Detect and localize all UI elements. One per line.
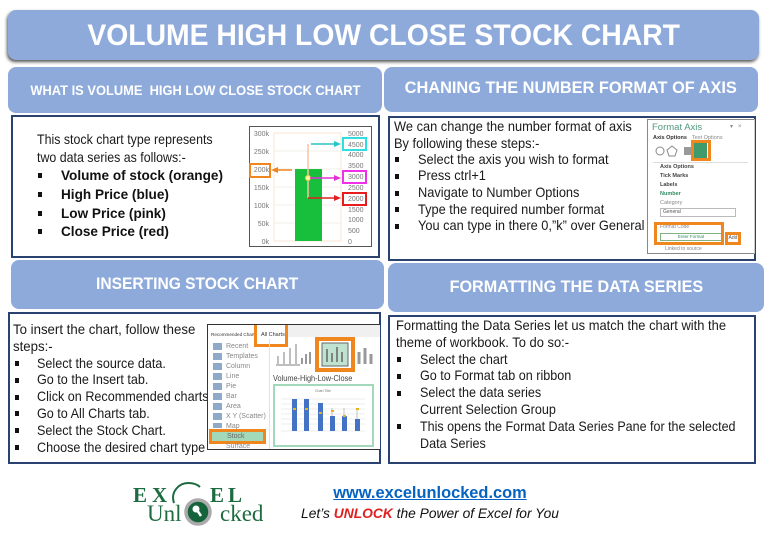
steps list: Type the required number format	[418, 200, 604, 216]
pane icons	[656, 146, 691, 156]
steps list: Data Series	[420, 434, 486, 450]
chart: volume high low close example	[249, 126, 372, 247]
heading: what is volume high low close	[8, 67, 382, 113]
screenshot: format axis pane: Axis Options	[660, 164, 694, 170]
screenshot: format axis pane: Category	[660, 200, 682, 206]
logo: excel unlocked: E	[210, 483, 224, 507]
panel: inserting stock chart	[8, 312, 381, 464]
heading: formatting the data series	[388, 263, 764, 312]
steps list: Choose the desired chart type	[37, 438, 205, 454]
chart: volume high low close example: 2000	[348, 196, 364, 203]
heading: changing number format	[384, 67, 758, 112]
intro text	[37, 130, 213, 164]
callout boxes	[343, 138, 366, 150]
intro text: This stock chart type represents	[37, 130, 213, 146]
heading: inserting stock chart: INSERTING STOCK CHART	[96, 275, 299, 293]
chart: volume high low close example: 300k	[254, 131, 269, 138]
chart: volume high low close example: 1500	[348, 207, 364, 214]
screenshot: insert chart dialog: Line	[226, 373, 239, 380]
intro text: two data series as follows:-	[37, 148, 186, 164]
screenshot: insert chart dialog: Stock	[227, 433, 245, 440]
screenshot: format axis pane: Format Axis	[652, 122, 702, 133]
panel: what is the chart	[11, 115, 380, 258]
screenshot: insert chart dialog: Volume-High-Low-Close	[273, 374, 352, 383]
logo: excel unlocked: cked	[220, 501, 263, 526]
series list: High Price (blue)	[61, 186, 169, 202]
chart: volume high low close example: 3500	[348, 163, 364, 170]
title banner: VOLUME HIGH LOW CLOSE STOCK CHART	[87, 19, 680, 52]
screenshot: insert chart dialog: Surface	[226, 443, 250, 450]
heading: changing number format: CHANING THE NUMBER FORMAT OF AXIS	[405, 79, 737, 97]
chart: volume high low close example: 0k	[262, 239, 269, 246]
screenshot: format axis pane: Axis Options	[653, 135, 687, 141]
intro text: To insert the chart, follow these	[13, 320, 195, 336]
chart type icons	[213, 343, 222, 428]
arrows	[311, 143, 335, 145]
steps list: Select the source data.	[37, 354, 166, 370]
intro text: theme of workbook. To do so:-	[396, 334, 569, 350]
heading: formatting the data series: FORMATTING THE DATA SERIES	[449, 278, 703, 296]
steps list: Current Selection Group	[420, 401, 556, 417]
chart: volume high low close example: 500	[348, 228, 360, 235]
steps list	[15, 354, 209, 455]
intro text: We can change the number format of axis	[394, 118, 632, 134]
steps list: Select the chart	[420, 350, 508, 366]
logo: excel unlocked: Unl	[147, 501, 182, 526]
steps list	[397, 350, 735, 450]
heading: inserting stock chart	[11, 260, 384, 309]
chart preview: Chart Title	[315, 389, 331, 393]
intro text: steps:-	[13, 338, 53, 354]
steps list: You can type in there 0,”k” over General	[418, 217, 644, 233]
chart preview	[273, 384, 374, 447]
steps list: Go to All Charts tab.	[37, 405, 150, 421]
steps list: Navigate to Number Options	[418, 184, 579, 200]
screenshot: insert chart dialog: All Charts	[261, 332, 285, 338]
screenshot: format axis pane: Tick Marks	[660, 173, 688, 179]
screenshot: format axis pane: ▾ ×	[730, 124, 742, 130]
chart: volume high low close example: 4000	[348, 152, 364, 159]
screenshot: format axis pane: Linked to source	[665, 246, 702, 252]
screenshot: insert chart dialog: Area	[226, 403, 241, 410]
logo: excel unlocked	[133, 482, 264, 526]
screenshot: insert chart dialog: Column	[226, 363, 250, 370]
logo: excel unlocked: X	[152, 483, 167, 507]
heading: what is volume high low close: WHAT IS VOLUME HIGH LOW CLOSE STOCK CHART	[30, 82, 360, 98]
screenshot: insert chart dialog: Bar	[226, 393, 237, 400]
series list: Close Price (red)	[61, 223, 169, 239]
chart: volume high low close example: 250k	[254, 149, 269, 156]
series list: Volume of stock (orange)	[61, 167, 223, 183]
website link: www.excelunlocked.com	[333, 484, 527, 502]
steps list: Go to Format tab on ribbon	[420, 367, 571, 383]
steps list: Select the data series	[420, 384, 541, 400]
logo: excel unlocked: E	[133, 483, 147, 507]
chart: volume high low close example: 5000	[348, 131, 364, 138]
chart: volume high low close example: 3000	[348, 174, 364, 181]
screenshot: format axis pane: Enter Format	[678, 234, 704, 239]
chart: volume high low close example: 200k	[254, 167, 269, 174]
screenshot: insert chart dialog	[207, 324, 380, 450]
steps list: Go to the Insert tab.	[37, 371, 148, 387]
intro text	[394, 118, 632, 151]
intro text: Formatting the Data Series let us match the chart with the	[396, 316, 726, 332]
intro text	[13, 320, 195, 354]
screenshot: format axis pane: Text Options	[692, 135, 723, 141]
screenshot: insert chart dialog: Pie	[226, 383, 236, 390]
screenshot: insert chart dialog: Templates	[226, 353, 258, 360]
chart: volume high low close example: 2500	[348, 185, 364, 192]
title banner	[8, 10, 759, 60]
chart: volume high low close example: 0	[348, 239, 352, 246]
steps list: Press ctrl+1	[418, 167, 486, 183]
intro text: By following these steps:-	[394, 134, 539, 150]
chart: volume high low close example: 50k	[258, 221, 269, 228]
steps list: Click on Recommended charts	[37, 388, 209, 404]
logo: excel unlocked: L	[228, 483, 242, 507]
steps list: Select the Stock Chart.	[37, 422, 166, 438]
panel: formatting data series	[388, 315, 756, 464]
screenshot: format axis pane: Format Code	[660, 224, 689, 230]
steps list: This opens the Format Data Series Pane for the selected	[420, 418, 735, 434]
screenshot: format axis pane	[647, 119, 755, 254]
chart: volume high low close example: 4500	[348, 142, 364, 149]
chart type thumbnails	[276, 337, 372, 372]
screenshot: format axis pane: General	[663, 209, 681, 215]
panel: changing number format	[388, 116, 756, 261]
screenshot: insert chart dialog: Map	[226, 423, 240, 430]
screenshot: format axis pane: Labels	[660, 182, 677, 188]
steps list	[395, 150, 644, 233]
steps list: Select the axis you wish to format	[418, 150, 609, 166]
screenshot: insert chart dialog: X Y (Scatter)	[226, 413, 266, 420]
chart: volume high low close example: 150k	[254, 185, 269, 192]
chart: volume high low close example: 100k	[254, 203, 269, 210]
series list	[38, 167, 223, 239]
series list: Low Price (pink)	[61, 205, 166, 221]
intro text	[396, 316, 726, 350]
volume bar	[295, 169, 322, 241]
chart: volume high low close example: 1000	[348, 217, 364, 224]
icon: padlock	[172, 482, 212, 526]
screenshot: format axis pane: Number	[660, 191, 681, 197]
screenshot: format axis pane: Add	[729, 235, 737, 241]
screenshot: insert chart dialog: Recent	[226, 343, 248, 350]
tagline: Let’s UNLOCK the Power of Excel for You	[301, 506, 559, 521]
